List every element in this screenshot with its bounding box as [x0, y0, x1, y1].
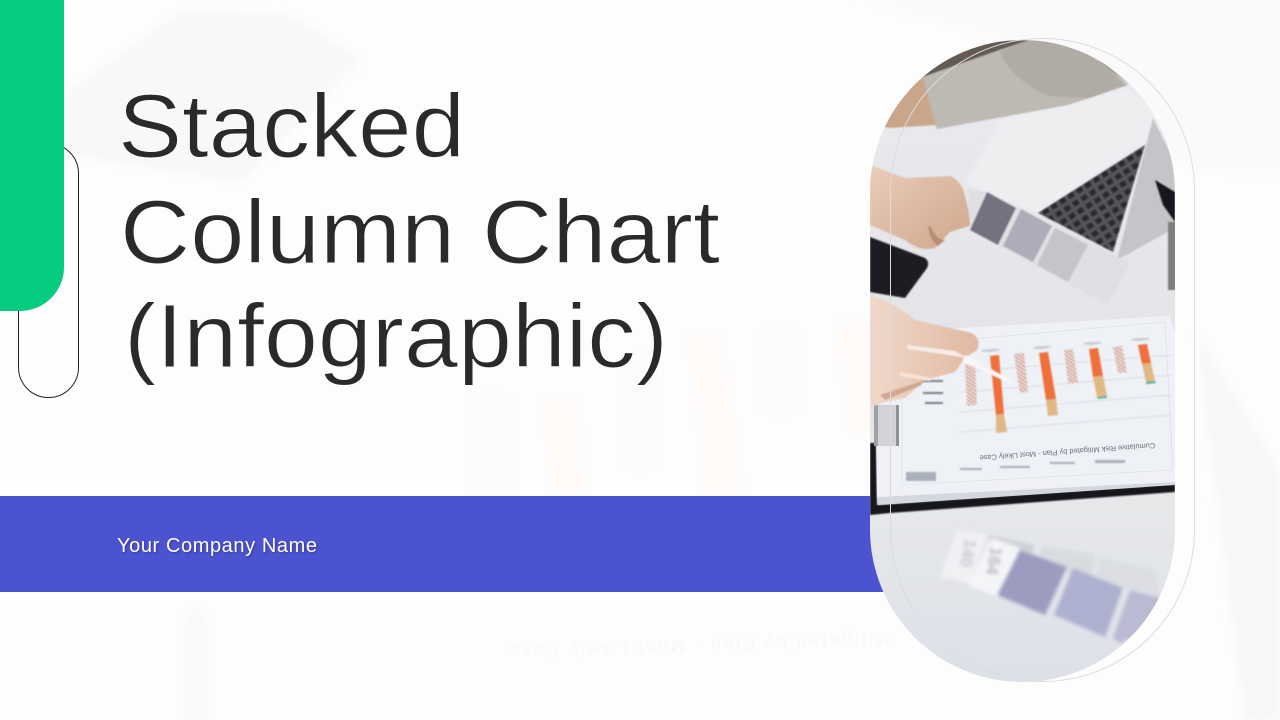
capsule outline	[890, 38, 1194, 682]
photo capsule	[870, 40, 1176, 682]
photo: hand with pen	[870, 295, 1015, 407]
outline pill	[18, 144, 78, 398]
photo: pen cup	[1155, 180, 1176, 290]
photo: blurred swatches foreground: 140	[956, 537, 980, 569]
photo: blurred swatches foreground	[940, 530, 1175, 643]
title: Stacked	[118, 77, 465, 177]
photo: chart on paper: mitigation	[1084, 340, 1101, 346]
photo: chart on paper: mitigation	[982, 347, 999, 353]
faded photo background: Mitigated by Plan - Most Likely Case	[510, 629, 890, 662]
title: (Infographic)	[124, 287, 668, 387]
green tab	[0, 0, 64, 311]
company band	[0, 496, 890, 592]
title	[118, 77, 720, 387]
photo: colour swatch strip	[968, 190, 1120, 282]
photo: clipboard and paper	[870, 316, 1175, 515]
photo: upside-down chart caption: Cumulative Risk Mitigated by Plan - Most Likely Case	[979, 441, 1156, 463]
photo: hand holding swatch	[870, 165, 972, 249]
photo: sweater sleeve	[870, 40, 1130, 130]
photo: laptop	[1038, 118, 1175, 260]
title: Column Chart	[120, 183, 720, 283]
company name: Your Company Name	[117, 535, 317, 557]
photo: chart on paper: mitigation	[1132, 336, 1149, 342]
photo: blurred swatches foreground: 164	[982, 545, 1006, 577]
photo: phone	[870, 237, 928, 298]
photo: chart on paper	[906, 336, 1172, 481]
photo: chart on paper: mitigation	[1034, 344, 1051, 350]
